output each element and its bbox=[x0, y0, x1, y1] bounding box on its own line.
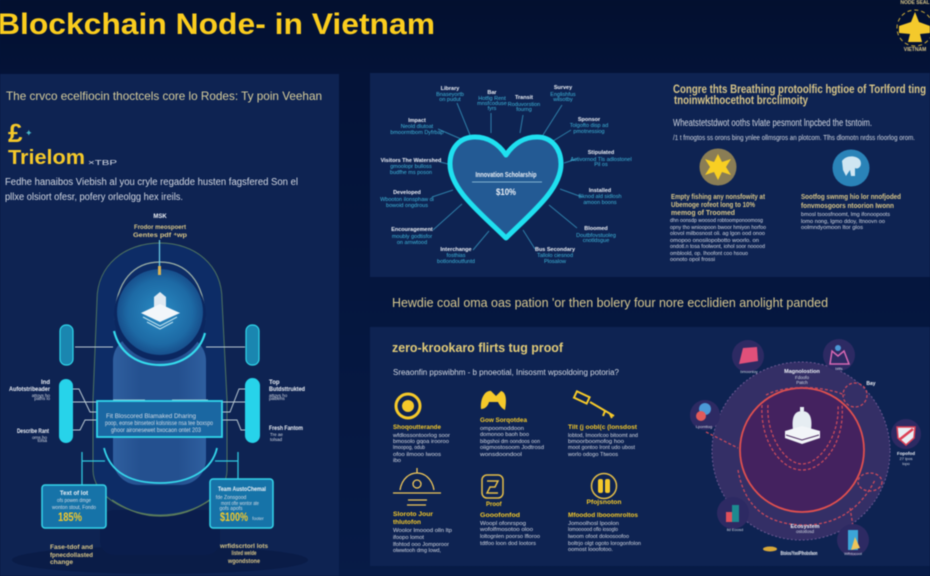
panel: heart and text bbox=[370, 73, 930, 277]
item 5: loltognlen poorso lfloroo bbox=[480, 534, 540, 540]
top diagram label bbox=[133, 214, 187, 239]
spoke labels: Installed bbox=[589, 188, 611, 194]
right stat card: footer bbox=[252, 516, 264, 521]
satellite: left: Lpomtlog bbox=[696, 424, 712, 429]
right headline: tnoinwkthocethot brcclimoity bbox=[674, 93, 808, 107]
spoke labels: Visitors The Watershed bbox=[381, 158, 441, 164]
circular ecosystem diagram bbox=[690, 339, 921, 557]
icon: ring bear bbox=[396, 394, 420, 418]
item 2 bbox=[479, 417, 544, 458]
heart: Innovation Scholarship bbox=[476, 172, 536, 179]
satellite: top right bbox=[823, 339, 855, 371]
item 4: olwwtooh dmg lowd, bbox=[393, 548, 441, 554]
item 4 bbox=[393, 511, 452, 554]
icon: dome bbox=[393, 468, 441, 505]
spoke labels: Pil os bbox=[594, 162, 608, 168]
heart: $10% bbox=[496, 187, 516, 197]
icon: dome node bbox=[785, 407, 820, 444]
icon: top right emblem: NODE SEAL bbox=[900, 0, 930, 6]
left stat card: 185% bbox=[58, 510, 82, 524]
item 1: Shoqoutterande bbox=[393, 424, 441, 431]
spoke labels: Encouragement bbox=[391, 227, 433, 233]
spoke labels: Plosalow bbox=[544, 259, 566, 265]
item 6 bbox=[568, 512, 641, 553]
item 2: ompoomoddoon bbox=[480, 426, 524, 432]
satellite: top left: bmoonloy bbox=[740, 369, 758, 374]
spoke labels: Library bbox=[441, 86, 460, 92]
center callout box: Fit Bloscored Blamaked Dharing bbox=[106, 414, 196, 420]
item 4: Sloroto Jour bbox=[393, 511, 433, 518]
top diagram label: Gentes pdf ⁴wp bbox=[133, 233, 187, 239]
icon: coin badge bbox=[586, 474, 622, 506]
left side labels: Describe Rant bbox=[17, 429, 49, 435]
orbit labels: Magnolostion bbox=[784, 369, 821, 375]
spoke labels: Tolgofto disp ad bbox=[570, 123, 608, 129]
left side labels: Aufotstribeader bbox=[9, 387, 51, 393]
right upper pill bbox=[246, 325, 259, 365]
spoke labels: Developed bbox=[393, 190, 421, 196]
left intro text: Fedhe hanaibos Viebish al you cryle regadde husten fagsfered Son el bbox=[5, 177, 298, 188]
satellite: bottom left: lld Eoosd bbox=[727, 527, 743, 532]
logo: £ bbox=[8, 118, 23, 148]
logo: Trielom bbox=[8, 147, 85, 169]
right side labels: palbehs bbox=[269, 396, 286, 401]
left feature text: ondotl.n tosa foolwont, iohol soor nooood bbox=[670, 244, 765, 250]
right side labels: Tre ae bbox=[270, 432, 283, 437]
item 4: ifoopo lomot bbox=[393, 535, 424, 541]
satellite: right bbox=[891, 419, 921, 466]
item 1 bbox=[392, 424, 450, 464]
left side labels: orns ho bbox=[32, 435, 47, 440]
spoke labels: Bnaseyortb bbox=[436, 92, 464, 98]
satellite: bottom right: Wfhtocool bbox=[844, 551, 862, 556]
panel: bottom proof section bbox=[370, 327, 930, 566]
item 2: Gow Sorqotdea bbox=[480, 417, 527, 424]
spoke labels: pmotnessiog bbox=[573, 129, 605, 135]
heart bbox=[450, 137, 561, 238]
item 5: tdtfoo loon dod lootors bbox=[480, 541, 536, 547]
outer ring bbox=[712, 362, 890, 540]
item 1: lmoopog, odub bbox=[393, 445, 425, 451]
spoke labels: Sponsor bbox=[578, 117, 601, 123]
orbit labels: ostotlosd bbox=[796, 529, 815, 534]
item 6: oomost looofotoo. bbox=[568, 547, 613, 553]
inner circle bbox=[740, 388, 864, 512]
item 2: oiigmostosoom Jodtrosd bbox=[480, 445, 544, 451]
satellite: right: lopo bbox=[902, 461, 911, 466]
connectors bbox=[73, 347, 245, 430]
spoke labels: Bknod ald sidlosh bbox=[578, 194, 622, 200]
left feature text: ombloold, op. Ihoofont coo hsouo bbox=[670, 251, 748, 257]
top diagram label: MSK bbox=[153, 214, 167, 220]
icon: blue badge bbox=[832, 150, 870, 186]
left feature text: memog of Troomed bbox=[671, 210, 735, 217]
spoke labels: on arnwtood bbox=[397, 240, 427, 246]
spoke labels: Wbooton ilonsphaw di bbox=[380, 197, 434, 203]
right stat card: $100% bbox=[220, 510, 248, 524]
item 3: lobtod, Imoorlcoo bitoomt and bbox=[568, 433, 638, 439]
spoke labels: on pudut bbox=[439, 97, 461, 103]
left feature text: omopoo onosilopobotto woorlo. on bbox=[670, 238, 759, 244]
spoke labels: Interchange bbox=[440, 247, 472, 253]
satellite: bottom left bbox=[717, 497, 749, 532]
left stat card: Text of lot bbox=[60, 491, 88, 497]
center callout box: ghoor aironesewet bxocaon ontet 203 bbox=[111, 428, 202, 434]
right caption: listed welde bbox=[232, 551, 257, 557]
item 6: lwoom ofoot doloosoofoo bbox=[568, 534, 629, 540]
item 2: domonoo baoh boo bbox=[480, 432, 529, 438]
left side labels: paths lo bbox=[34, 396, 50, 401]
item 1: wfdlossontoorlog soor bbox=[392, 433, 450, 439]
spoke labels: Englishfus bbox=[550, 92, 576, 98]
item 4: lfohtod ooo Jomporoor bbox=[393, 542, 449, 548]
right feature text: oolmndyomoon ltor glos bbox=[801, 225, 863, 231]
right side labels: Top bbox=[269, 380, 280, 386]
item 3: bmoorboomofog hoo bbox=[568, 439, 624, 445]
left caption: Fase-tdof and bbox=[50, 545, 93, 551]
left large pill bbox=[59, 379, 73, 443]
item 1: ofoo ilmooo lwoos bbox=[393, 452, 441, 458]
right feature text: fonvmosgoors ntoorion Iwonn bbox=[801, 203, 894, 210]
item 5: Woopl ofonrspog bbox=[480, 521, 526, 527]
left feature text bbox=[670, 194, 766, 263]
right caption: wgondstone bbox=[227, 559, 261, 565]
right feature text bbox=[801, 194, 901, 231]
item 6: Mfoodod lbooomroltos bbox=[568, 512, 638, 519]
spoke labels: wilsotby bbox=[552, 97, 573, 103]
section heading: zero-krookaro flirts tug proof bbox=[392, 340, 564, 355]
spoke labels: Bar bbox=[487, 90, 497, 96]
satellite: right: Fopofod bbox=[897, 451, 915, 456]
right stat card: mont ofte wontor ate bbox=[221, 501, 259, 507]
middle heading: Hewdie coal oma oas pation 'or then bolery four nore ecclidien anolight panded bbox=[392, 295, 828, 310]
logo bbox=[8, 118, 118, 169]
left feature text: olovol milbosnost oli. ag lgon ood onoo bbox=[670, 231, 765, 237]
spoke labels: budfhe ms poson bbox=[390, 170, 432, 176]
right side labels bbox=[269, 380, 305, 442]
spoke labels: bowoid ongdrous bbox=[386, 203, 428, 209]
item 3: moot gontoo lront udo ubost bbox=[568, 445, 635, 451]
icon: top right emblem: VIETNAM bbox=[904, 47, 926, 53]
right stat card bbox=[210, 479, 273, 528]
left heading: The crvco ecelfiocin thoctcels core lo Rodes: Ty poin Veehan bbox=[6, 89, 322, 103]
spoke labels: Stipulated bbox=[588, 150, 614, 156]
left side labels bbox=[9, 380, 51, 443]
spoke labels: Doutbfovstuoleg bbox=[576, 233, 616, 239]
right stat card: fde Zonsgood bbox=[216, 495, 247, 501]
item 3: worlo odogo Ttwoos bbox=[567, 452, 618, 458]
left upper pill bbox=[60, 325, 73, 365]
item 4: thlutofon bbox=[393, 519, 421, 526]
shadow base bbox=[12, 510, 308, 574]
item 4: Woolor lmoood olln ltp bbox=[393, 528, 452, 534]
icon: key bbox=[574, 391, 614, 418]
left caption: change bbox=[50, 560, 74, 566]
logo: ×TBP bbox=[88, 160, 118, 167]
right large pill bbox=[245, 378, 260, 443]
spoke labels: cnotldsgue bbox=[583, 238, 609, 244]
satellite: bottom right bbox=[837, 524, 869, 556]
left feature text: opny tho wnioopoon bwoor hmiyon horfoo bbox=[670, 225, 766, 231]
right caption: wrfidscrtorl lots bbox=[219, 544, 269, 550]
right side labels: tolsad bbox=[270, 437, 283, 442]
spoke labels: Bus Secondary bbox=[535, 247, 576, 253]
item 5: Gooofonfod bbox=[480, 512, 520, 519]
spoke labels: Neold dlutoat bbox=[401, 124, 434, 130]
panel: left blockchain node diagram bbox=[0, 74, 339, 576]
orbit labels: Ecosystem bbox=[790, 524, 820, 530]
left side labels: Ind bbox=[41, 380, 50, 386]
spoke labels: Tallolo ciesnod bbox=[537, 253, 573, 259]
title: Blockchain Node- in Vietnam bbox=[0, 8, 435, 41]
item 5 bbox=[479, 512, 540, 547]
capsule body bbox=[93, 240, 227, 516]
orbit labels: Bay bbox=[866, 381, 876, 387]
legend: Btolos/YoolPlhobsfaon bbox=[780, 551, 818, 557]
satellite: right: 27 lpos bbox=[900, 456, 912, 461]
center callout box bbox=[97, 401, 222, 437]
orbit labels: Fdoofo bbox=[795, 375, 809, 380]
left side labels: attoys ho bbox=[32, 393, 50, 398]
left caption bbox=[50, 545, 93, 566]
left feature text: oonoto opol frossi bbox=[670, 257, 715, 263]
dashed orbits bbox=[706, 383, 882, 526]
right stat card: Team AustoChemal bbox=[218, 487, 266, 493]
left feature text: Ubemoge rofeot long to 10% bbox=[671, 202, 756, 209]
spoke labels: botlondoutfuntd bbox=[437, 259, 475, 265]
spoke labels: amoon boons bbox=[583, 200, 617, 206]
right subheading: Wheatstetstdwot ooths tvlate pesmont lnpcbed the tsntoim. bbox=[673, 118, 872, 129]
legend bbox=[763, 546, 818, 557]
left caption: fpnecdollasted bbox=[50, 553, 93, 559]
spoke labels: Survey bbox=[554, 85, 573, 91]
spoke labels: mnsfcoduse bbox=[477, 101, 507, 107]
spoke labels: gmoolopr bulloss bbox=[390, 164, 432, 170]
right side labels: Fresh Fantom bbox=[269, 426, 303, 432]
spoke labels: fourng bbox=[516, 107, 532, 113]
left stat card bbox=[42, 485, 106, 528]
spoke labels: Roduvorstion bbox=[508, 102, 540, 108]
satellite: left bbox=[690, 400, 720, 430]
icon: gamepad bbox=[481, 391, 506, 410]
satellite: top right: bltfs bbox=[835, 366, 843, 371]
spokes bbox=[432, 103, 582, 250]
left side labels: tolsa bbox=[37, 438, 47, 443]
spoke labels bbox=[380, 85, 632, 265]
item 3: Tilt (j oobl(c (lonsdost bbox=[568, 424, 638, 431]
left stat card: ofs powen dmge bbox=[57, 498, 91, 504]
orbit labels bbox=[784, 369, 876, 534]
left intro text: pllxe olsiort ofesr, pofery orleolgg hex ireils. bbox=[5, 192, 183, 203]
icon: proof badge: Proof bbox=[486, 502, 503, 508]
spoke labels: bmoormtbom Dyfrbap bbox=[390, 130, 444, 136]
card connectors bbox=[82, 452, 238, 485]
spoke labels: Transit bbox=[515, 95, 533, 101]
icon: top right emblem bbox=[897, 0, 930, 53]
left stat card: wonton stout, Fondo bbox=[52, 505, 96, 511]
logo: ✦ bbox=[25, 128, 33, 138]
item 6: lomoooood oflo iosoglo bbox=[568, 527, 618, 533]
right side labels: attoys ho bbox=[269, 393, 288, 398]
right stat card: gofs apofs bbox=[219, 506, 243, 512]
item 6: Jomoolhosl lpoolon bbox=[568, 521, 619, 527]
right side labels: Butdsttrukted bbox=[269, 387, 305, 393]
right feature text: Sootfog swnmg hio lor nnofjoded bbox=[801, 194, 901, 201]
item 1: ibo bbox=[393, 458, 401, 464]
spoke labels: Impact bbox=[408, 118, 426, 124]
icon: proof badge bbox=[482, 475, 503, 508]
item 5: wofolfmosotoo oloo bbox=[479, 527, 533, 533]
right headline bbox=[673, 82, 926, 107]
top diagram label: Frodor meospoert bbox=[134, 225, 186, 231]
item 6: boltrjo olgt ogoto lorogonfolon bbox=[568, 541, 641, 547]
center callout box: poop, eonse binseteol kolsnisse nsa tee boxspo bbox=[105, 421, 214, 427]
satellite: top left bbox=[732, 340, 764, 374]
spoke labels: Bloomed bbox=[584, 226, 608, 232]
section subheading: Sreaonfin ppswibhm - b pnoeotial, Inisosmt wpsoldoing potoria? bbox=[393, 368, 620, 377]
item 1: bmosolo gqoa irooroo bbox=[393, 439, 449, 445]
spoke labels: fosthias bbox=[447, 253, 466, 259]
left intro text bbox=[5, 177, 298, 203]
item 2: bibgshoi dm oondoos oon bbox=[480, 439, 540, 445]
left feature text: dhn oonsdp woosod robtoomponoomosg bbox=[670, 218, 763, 224]
icon: coin badge: Pfojsnoton bbox=[586, 500, 622, 506]
right feature text: bmosl tsoosfnoomt, lmg ifonoopoots bbox=[801, 212, 890, 218]
orbit labels: Patch bbox=[796, 380, 808, 385]
right feature text: lomo nong, lgmo ddoy, Itnoovn oo bbox=[801, 219, 885, 225]
icon: star badge bbox=[700, 148, 736, 186]
spoke labels: Activornod Tls adlostonel bbox=[570, 157, 632, 163]
item 2: wonsdoondool bbox=[479, 452, 522, 458]
left feature text: Empty fishing any nonsfowity at bbox=[671, 194, 766, 201]
spoke labels: moubly godtisfor bbox=[392, 234, 432, 240]
item 3 bbox=[567, 424, 638, 458]
spoke labels: fyrs bbox=[488, 106, 497, 112]
right caption bbox=[219, 544, 269, 565]
icon: central node bbox=[141, 292, 180, 329]
spoke labels: Hotfig Rent bbox=[478, 96, 506, 102]
